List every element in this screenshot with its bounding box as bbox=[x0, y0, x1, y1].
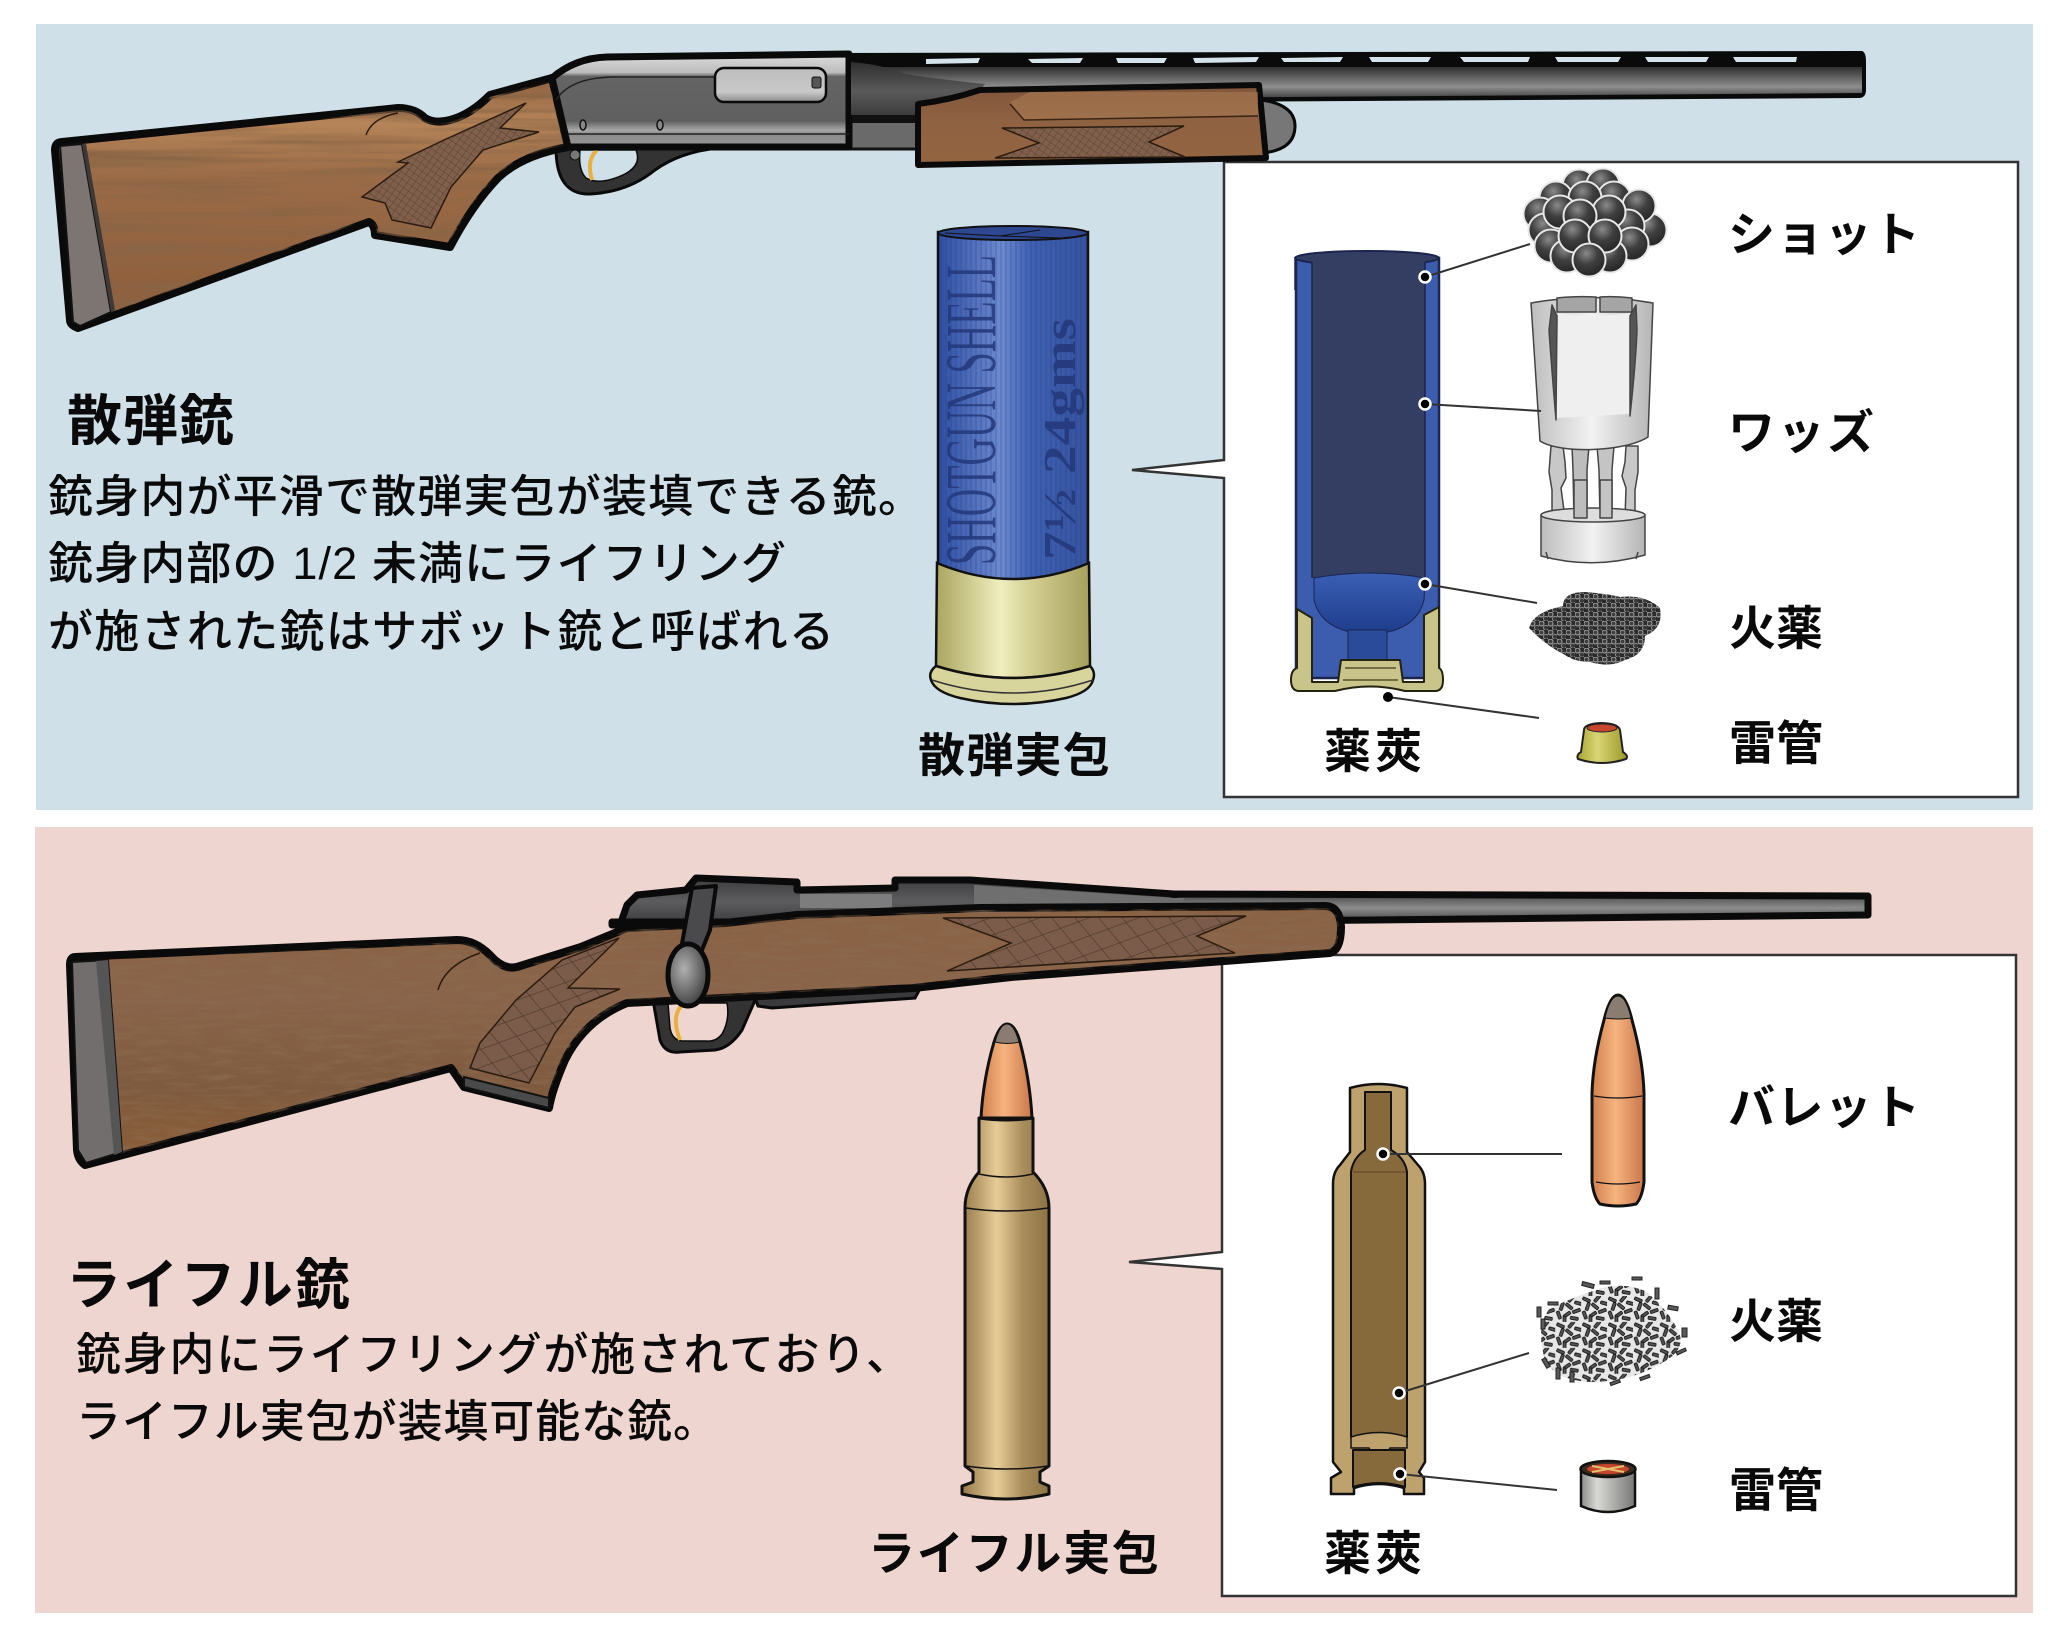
leader lines: shotgun parts bbox=[1388, 244, 1541, 718]
magazine plate bbox=[750, 985, 922, 1008]
text: shotgun description: が施された銃はサボット銃と呼ばれる bbox=[48, 606, 834, 657]
text: shotgun description: 銃身内部の 1/2 未満にライフリング bbox=[48, 538, 786, 589]
icon: bullet bbox=[1592, 995, 1644, 1206]
icon: cutaway rifle case bbox=[1331, 1084, 1425, 1494]
barrel bbox=[1170, 894, 1868, 922]
trigger guard bbox=[653, 998, 756, 1052]
barrel and rib bbox=[845, 51, 1866, 104]
panel: rifle background bbox=[35, 827, 2033, 1613]
text: rifle description bbox=[76, 1329, 911, 1447]
heading: rifle: ライフル銃 bbox=[66, 1254, 350, 1316]
label: case: 薬莢 bbox=[1324, 725, 1422, 778]
text: rifle description: 銃身内にライフリングが施されており、 bbox=[76, 1329, 911, 1380]
label: powder: 火薬 bbox=[1729, 602, 1823, 655]
label: shotgun shell: 散弾実包 bbox=[918, 729, 1110, 782]
leader dots: shotgun parts bbox=[1383, 272, 1430, 702]
leader lines: rifle parts bbox=[1383, 1154, 1562, 1490]
forend bbox=[918, 85, 1295, 165]
icon: rifle powder bbox=[1537, 1277, 1687, 1386]
label: primer: 雷管 bbox=[1729, 717, 1823, 770]
heading: shotgun: 散弾銃 bbox=[67, 390, 234, 452]
shell print: load: 7½ 24gms bbox=[1034, 318, 1085, 560]
icon: shot pellets bbox=[1524, 168, 1666, 276]
icon: cutaway shotgun shell case bbox=[1291, 251, 1443, 691]
label: powder: 火薬 bbox=[1729, 1295, 1823, 1348]
icon: shotgun powder bbox=[1529, 592, 1661, 665]
magazine tube bbox=[846, 115, 926, 149]
icon: rifle cartridge bbox=[962, 1024, 1049, 1499]
icon: rifle primer bbox=[1580, 1461, 1636, 1512]
leader dots: rifle parts bbox=[1378, 1148, 1406, 1480]
icon: shotgun primer bbox=[1577, 723, 1627, 763]
label: case: 薬莢 bbox=[1324, 1527, 1422, 1580]
panel: shotgun shell parts callout bbox=[1132, 162, 2018, 797]
text: shotgun description bbox=[48, 471, 923, 657]
icon: shotgun shell bbox=[930, 226, 1094, 704]
label: primer: 雷管 bbox=[1729, 1464, 1823, 1517]
panel: rifle cartridge parts callout bbox=[1129, 955, 2016, 1596]
text: shotgun description: 銃身内が平滑で散弾実包が装填できる銃。 bbox=[48, 471, 923, 522]
text: rifle description: ライフル実包が装填可能な銃。 bbox=[76, 1396, 718, 1447]
label: bullet: バレット bbox=[1728, 1081, 1920, 1134]
icon: wad bbox=[1531, 297, 1653, 563]
label: rifle cartridge: ライフル実包 bbox=[868, 1527, 1159, 1580]
receiver bbox=[552, 54, 985, 147]
shotgun illustration bbox=[55, 51, 1866, 328]
stock bbox=[55, 78, 568, 328]
action bbox=[612, 878, 1184, 925]
trigger guard bbox=[556, 140, 718, 194]
rifle illustration bbox=[70, 878, 1868, 1165]
bolt handle bbox=[668, 886, 716, 1006]
panel: shotgun background bbox=[36, 24, 2033, 810]
label: shot: ショット bbox=[1728, 208, 1920, 261]
stock bbox=[70, 906, 1341, 1165]
label: wad: ワッズ bbox=[1728, 406, 1874, 459]
